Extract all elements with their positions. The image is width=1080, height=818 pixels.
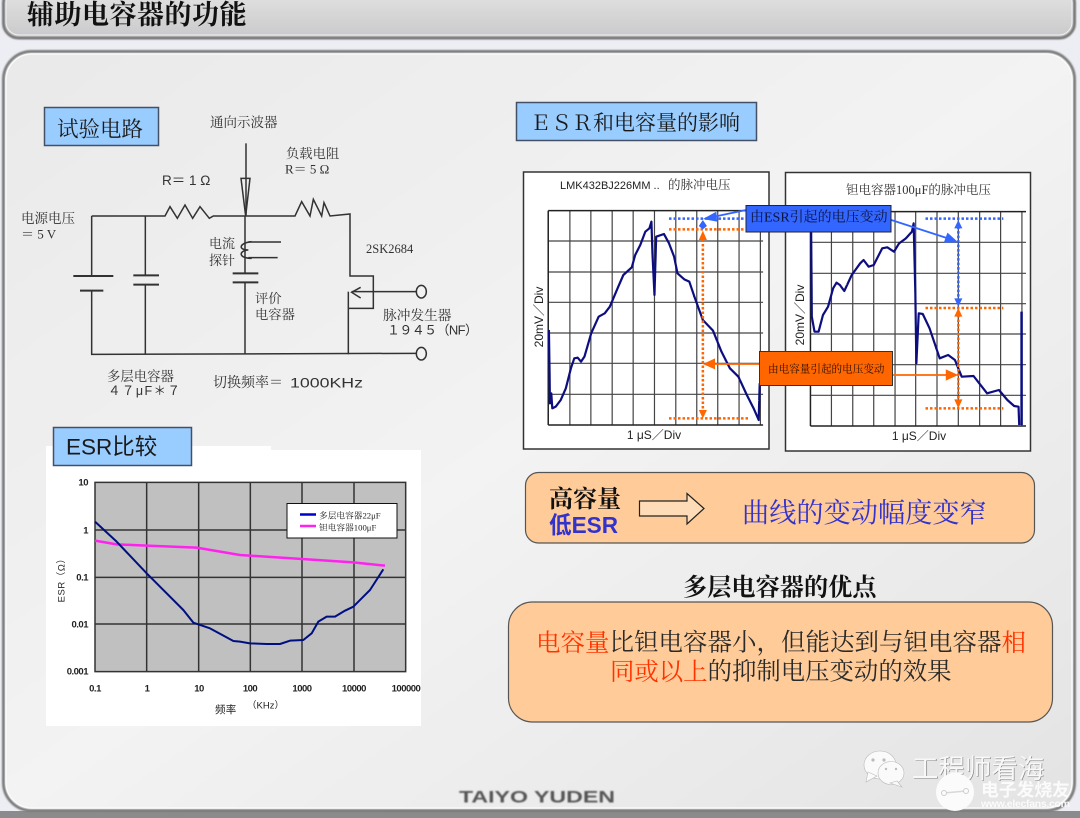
circuit labels: 电流	[209, 236, 235, 251]
circuit labels: 脉冲发生器	[383, 307, 452, 323]
scope chart: multilayer capacitor: LMK432BJ226MM ..	[560, 180, 660, 192]
heading: test circuit: 试验电路	[57, 118, 143, 142]
axis labels: 10	[78, 478, 88, 488]
watermark text: 工程师看海	[912, 754, 1044, 784]
axis labels: 频率	[215, 703, 236, 716]
callout: ESR voltage variation	[746, 206, 891, 232]
circuit labels: 多层电容器	[107, 368, 175, 384]
icon: WeChat bubbles	[864, 751, 904, 787]
circuit labels: 切换频率＝	[213, 374, 283, 391]
heading: ESR comparison	[54, 428, 192, 466]
callout: multilayer capacitor advantages	[508, 602, 1052, 722]
circuit labels: R＝ 1 Ω	[162, 173, 210, 188]
heading: ESR comparison: ESR比较	[66, 434, 157, 460]
heading: ESR and capacitance influence	[516, 102, 756, 140]
panel: ESR comparison	[46, 428, 421, 726]
axis labels: （KHz）	[247, 700, 284, 712]
callout: capacitance voltage variation	[760, 352, 892, 386]
heading: multilayer capacitor advantages: 多层电容器的优点	[683, 574, 878, 602]
axis labels: 0.1	[76, 572, 89, 584]
ESR line chart	[56, 478, 421, 716]
scope chart: tantalum capacitor: 钽电容器100μF的脉冲电压	[846, 182, 991, 197]
axis labels: 100	[243, 684, 257, 694]
circuit labels: 电源电压	[21, 210, 75, 226]
circuit labels: 电容器	[255, 306, 295, 322]
heading: ESR and capacitance influence: ＥＳＲ和电容量的影响	[530, 111, 740, 135]
axis labels: 0.001	[67, 666, 89, 678]
circuit labels: 通向示波器	[210, 115, 278, 130]
axis labels: 1	[145, 684, 151, 694]
legend: 多层电容器22μF	[319, 510, 381, 520]
axis labels: ESR（Ω）	[56, 554, 68, 602]
scope chart: multilayer capacitor	[524, 172, 769, 449]
icon: hollow arrow	[640, 494, 704, 524]
callout: capacitance voltage variation: 由电容量引起的电压变动	[768, 362, 885, 376]
axis labels: 0.01	[72, 620, 89, 630]
axis labels	[56, 478, 421, 716]
watermark text shadow: 工程师看海	[913, 755, 1045, 785]
watermark: elecfans: 电子发烧友	[981, 779, 1070, 800]
circuit labels: 探针	[209, 253, 235, 268]
watermark: elecfans: www.elecfans.com	[980, 798, 1070, 810]
logo: TAIYO YUDEN: TAIYO YUDEN	[459, 788, 615, 806]
circuit labels	[21, 115, 478, 398]
panel: ESR and capacitance influence	[516, 102, 1030, 451]
watermark: WeChat account	[864, 751, 1045, 787]
callout: ESR voltage variation: 由ESR引起的电压变动	[750, 208, 888, 226]
label: low ESR: 低ESR	[549, 512, 618, 538]
chart background	[46, 446, 421, 726]
circuit labels: ＝ 5 V	[21, 226, 57, 242]
watermark: elecfans	[936, 773, 1070, 811]
result text: 曲线的变动幅度变窄	[742, 498, 987, 528]
axis labels: 10	[194, 684, 204, 694]
circuit labels: ４７μF＊７	[108, 384, 180, 398]
circuit labels: 评价	[255, 291, 282, 306]
heading: test circuit	[44, 108, 158, 146]
callout: multilayer capacitor advantages: 电容量比钽电容器小，但能达到与钽电容器相	[536, 628, 1026, 656]
title: 辅助电容器的功能	[27, 0, 247, 30]
axis labels: 1000	[292, 684, 312, 694]
legend	[287, 504, 397, 538]
axis labels: 10000	[342, 684, 366, 694]
axis labels: 100000	[392, 684, 421, 694]
circuit diagram	[73, 143, 426, 360]
scope chart: tantalum capacitor: 20mV／Div	[793, 285, 807, 345]
circuit labels: １９４５（NF）	[387, 322, 478, 338]
header bar	[4, 0, 1074, 38]
label: high capacitance: 高容量	[549, 485, 621, 513]
panel: test circuit	[21, 108, 478, 398]
scope chart: tantalum capacitor	[786, 172, 1030, 451]
scope chart: multilayer capacitor: 20mV／Div	[532, 287, 546, 347]
scope chart: multilayer capacitor: 1 μS／Div	[627, 428, 681, 442]
scope chart: multilayer capacitor: 的脉冲电压	[668, 177, 731, 192]
axis labels: 0.1	[89, 684, 102, 694]
scope chart: tantalum capacitor: 1 μS／Div	[892, 429, 946, 443]
circuit labels: R＝ 5 Ω	[285, 162, 329, 176]
callout: high capacitance low ESR	[526, 472, 1034, 543]
icon: elecfans circle	[936, 773, 974, 811]
circuit labels: 1000KHz	[290, 374, 363, 390]
circuit labels: 负载电阻	[286, 145, 339, 161]
axis labels: 1	[83, 526, 89, 536]
legend: 钽电容器100μF	[319, 522, 376, 532]
callout: multilayer capacitor advantages: 同或以上的抑制电压变动的效果	[610, 658, 952, 686]
circuit labels: 2SK2684	[366, 242, 414, 256]
